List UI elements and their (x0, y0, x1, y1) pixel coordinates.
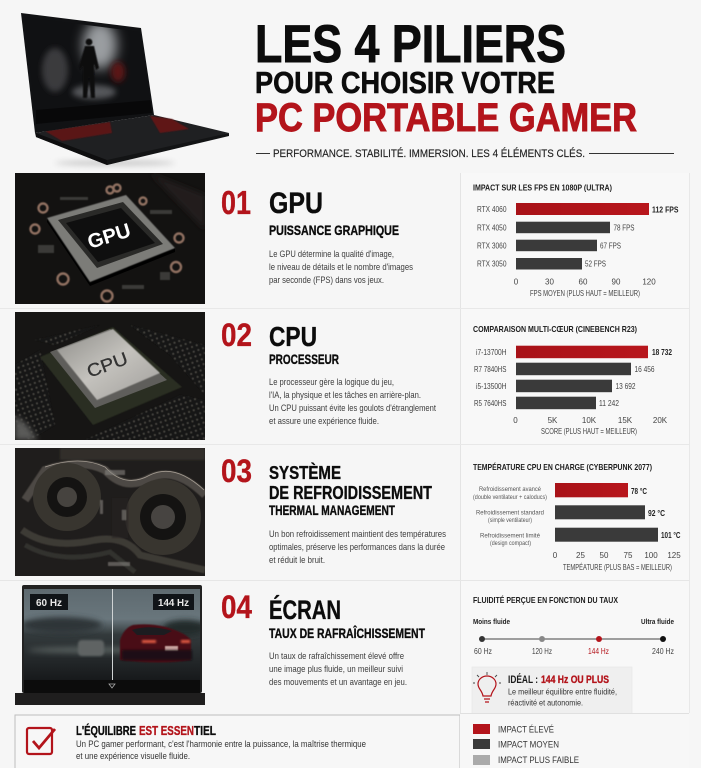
bar chart: Cinebench: 5K (548, 416, 558, 425)
subheading: PUISSANCE GRAPHIQUE (269, 222, 399, 238)
bar chart: Cinebench: 0 (513, 416, 518, 425)
number 01: 01 (221, 184, 251, 221)
callout: ideal rate (472, 667, 632, 714)
bar chart: FPS: 67 FPS (600, 242, 621, 250)
bar chart: Cinebench: SCORE (PLUS HAUT = MEILLEUR) (541, 427, 637, 436)
callout: ideal rate: IDÉAL : (508, 673, 538, 686)
bar chart: FPS: 52 FPS (585, 260, 606, 268)
bar chart: Cinebench: 11 242 (599, 399, 619, 408)
laptop base (35, 115, 229, 165)
bar chart: Cinebench: COMPARAISON MULTI-CŒUR (CINEBENCH R23) (473, 324, 637, 334)
bar chart: Cinebench: 13 692 (616, 382, 636, 391)
heading GPU: GPU (269, 187, 323, 220)
bar chart: FPS: IMPACT SUR LES FPS EN 1080P (ULTRA) (473, 182, 612, 192)
bar chart: temperature: 101 °C (661, 530, 680, 540)
description (269, 529, 446, 566)
bar chart: FPS: RTX 4060 (477, 205, 507, 214)
description: par seconde (FPS) dans vos jeux. (269, 275, 384, 286)
description: Le GPU détermine la qualité d'image, (269, 249, 394, 260)
panel: balance conclusion (15, 715, 460, 768)
GPU chip photo (15, 173, 205, 304)
refresh rate scale: 60 Hz (474, 647, 492, 656)
legend: high impact: IMPACT ÉLEVÉ (498, 724, 554, 734)
refresh rate scale (473, 595, 674, 656)
bar chart: FPS: 0 (514, 278, 519, 286)
title: LES 4 PILIERS (255, 15, 566, 74)
subtitle with rules: PERFORMANCE. STABILITÉ. IMMERSION. LES 4 ÉLÉMENTS CLÉS. (273, 147, 585, 160)
legend (460, 713, 689, 768)
GPU label: GPU (85, 220, 134, 254)
60 Hz label: 60 Hz (36, 598, 62, 609)
description (269, 377, 436, 427)
144 Hz label: 144 Hz (158, 598, 189, 609)
right fan (125, 479, 201, 555)
heading cooling: DE REFROIDISSEMENT (269, 483, 432, 503)
bar chart: temperature: 25 (576, 551, 585, 560)
bar chart: Cinebench: R7 7840HS (474, 365, 506, 374)
description: optimales, préserve les performances dans la durée (269, 542, 445, 553)
bar chart: temperature: 78 °C (631, 486, 647, 496)
number 03: 03 (221, 453, 252, 489)
title: PC PORTABLE GAMER (255, 96, 637, 140)
panel: cooling (15, 448, 681, 576)
description: Un taux de rafraîchissement élevé offre (269, 651, 404, 662)
callout: ideal rate: Le meilleur équilibre entre fluidité, (508, 688, 617, 696)
description: Le processeur gère la logique du jeu, (269, 377, 394, 388)
bar chart: Cinebench: 18 732 (652, 347, 672, 357)
bar chart: FPS: RTX 3050 (477, 260, 507, 268)
refresh rate scale: Ultra fluide (641, 617, 674, 626)
refresh rate scale: FLUIDITÉ PERÇUE EN FONCTION DU TAUX (473, 595, 618, 605)
description (269, 249, 413, 286)
title (255, 15, 637, 140)
bar chart: temperature: Refroidissement limité (480, 532, 540, 540)
bar chart: Cinebench: 20K (653, 416, 668, 425)
legend: medium impact: IMPACT MOYEN (498, 740, 559, 750)
heading screen: ÉCRAN (269, 594, 341, 625)
description: Un CPU puissant évite les goulots d'étranglement (269, 403, 436, 414)
bar chart: FPS: 90 (612, 278, 621, 286)
bar chart: Cinebench: 16 456 (634, 365, 655, 374)
bar chart: FPS: 60 (579, 278, 588, 286)
bar chart: Cinebench: i5-13500H (476, 382, 507, 391)
header laptop illustration (20, 10, 229, 166)
subheading: PROCESSEUR (269, 351, 339, 367)
CPU label: CPU (84, 348, 130, 382)
bar chart: temperature: (design compact) (490, 541, 531, 547)
bar chart: temperature: (double ventilateur + caloducs) (473, 495, 547, 501)
heading cooling: SYSTÈME (269, 462, 341, 483)
laptop screen (21, 13, 154, 133)
panel: screen (15, 585, 674, 714)
bar chart: temperature: 100 (644, 551, 658, 560)
bar chart: temperature (473, 462, 681, 572)
bar chart: temperature: (simple ventilateur) (488, 518, 532, 524)
conclusion heading: L'ÉQUILIBRE (76, 723, 136, 738)
description: et assure une expérience fluide. (269, 416, 379, 427)
legend: high impact (473, 724, 554, 734)
panel: GPU (15, 173, 679, 304)
bar chart: temperature: TEMPÉRATURE CPU EN CHARGE (CYBERPUNK 2077) (473, 462, 652, 472)
conclusion text: Un PC gamer performant, c'est l'harmonie entre la puissance, la maîtrise thermique (76, 739, 366, 750)
bar chart: FPS: 78 FPS (614, 224, 634, 232)
icon: check box (27, 728, 55, 754)
blurred car (78, 640, 104, 656)
bar chart: Cinebench (473, 324, 672, 436)
bar chart: FPS: 120 (642, 278, 656, 286)
refresh rate scale: 144 Hz (588, 647, 609, 656)
legend: lower impact: IMPACT PLUS FAIBLE (498, 755, 579, 765)
bar chart: temperature: 75 (624, 551, 633, 560)
bar chart: Cinebench: 15K (618, 416, 633, 425)
60 Hz label (30, 594, 68, 610)
bar chart: temperature: 0 (553, 551, 558, 560)
bar chart: temperature: Refroidissement avancé (479, 486, 541, 493)
bar chart: temperature: Refroidissement standard (476, 510, 544, 516)
refresh rate scale: 120 Hz (532, 647, 552, 656)
red car (120, 624, 192, 662)
refresh rate laptop photo (15, 585, 207, 705)
bar chart: temperature: 125 (667, 551, 681, 560)
heading CPU: CPU (269, 321, 317, 352)
description: une image plus fluide, un meilleur suivi (269, 664, 403, 675)
heading cooling (269, 462, 432, 503)
icon: light bulb (473, 672, 501, 702)
number 02: 02 (221, 317, 252, 353)
description (269, 651, 407, 688)
callout: ideal rate: 144 Hz OU PLUS (541, 674, 609, 686)
CPU chip photo (15, 312, 205, 440)
bar chart: FPS: 112 FPS (652, 204, 679, 214)
refresh rate scale: Moins fluide (473, 617, 510, 626)
conclusion heading: EST ESSEN (139, 724, 194, 738)
bar chart: FPS: RTX 3060 (477, 242, 507, 250)
bar chart: temperature: 50 (600, 551, 609, 560)
description: des mouvements et un avantage en jeu. (269, 677, 407, 688)
subheading: THERMAL MANAGEMENT (269, 503, 396, 518)
number 04: 04 (221, 589, 252, 625)
panel separators (0, 173, 690, 713)
bar chart: Cinebench: 10K (582, 416, 597, 425)
conclusion heading: TIEL (194, 724, 216, 738)
bar chart: FPS: RTX 4050 (477, 224, 507, 232)
conclusion text (76, 739, 366, 762)
subheading: TAUX DE RAFRAÎCHISSEMENT (269, 626, 426, 641)
bar chart: FPS: FPS MOYEN (PLUS HAUT = MEILLEUR) (530, 289, 640, 298)
legend: medium impact (473, 739, 559, 750)
bar chart: FPS (473, 182, 679, 298)
description: et réduit le bruit. (269, 555, 325, 566)
panel: CPU (15, 312, 672, 440)
description: le niveau de détails et le nombre d'images (269, 262, 413, 273)
144 Hz label (153, 594, 194, 610)
refresh rate scale: 240 Hz (652, 647, 674, 656)
callout: ideal rate: réactivité et autonomie. (508, 698, 583, 708)
legend: lower impact (473, 755, 579, 765)
cooling system photo (15, 448, 205, 576)
bar chart: Cinebench: R5 7640HS (474, 399, 506, 408)
description: l'IA, la physique et les tâches en arrière-plan. (269, 390, 421, 401)
description: Un bon refroidissement maintient des températures (269, 529, 446, 540)
bar chart: FPS: 30 (545, 278, 554, 286)
left fan (33, 463, 101, 531)
conclusion heading (76, 723, 216, 738)
bar chart: temperature: 92 °C (648, 508, 665, 518)
bar chart: Cinebench: i7-13700H (476, 348, 507, 357)
conclusion text: et une expérience visuelle fluide. (76, 751, 190, 762)
title: POUR CHOISIR VOTRE (255, 65, 555, 100)
red keyboard (45, 122, 112, 141)
